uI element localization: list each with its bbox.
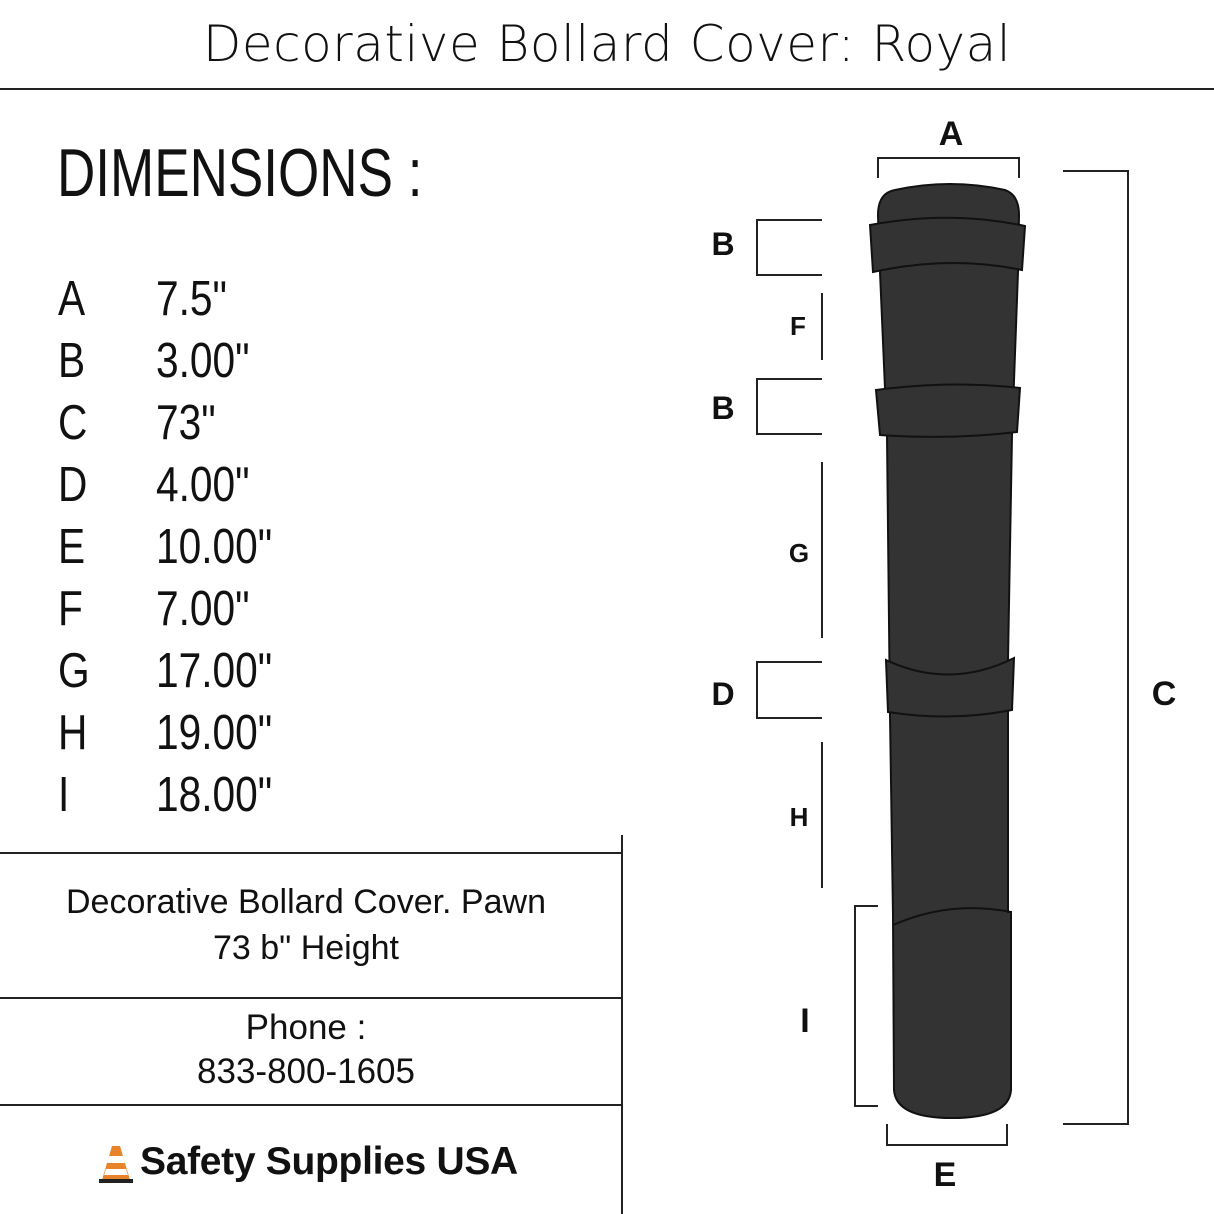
- dimension list: C: [58, 396, 87, 450]
- product name box: 73 b" Height: [213, 929, 399, 967]
- bollard diagram: B: [711, 226, 735, 262]
- dimension list: A: [58, 272, 85, 326]
- dimension values: 7.00": [156, 582, 250, 636]
- dimension list: E: [58, 520, 85, 574]
- dimension list: F: [58, 582, 83, 636]
- bollard diagram: D: [711, 676, 735, 712]
- bollard diagram: A: [939, 115, 963, 153]
- bollard diagram: E: [934, 1156, 956, 1194]
- bollard diagram: H: [790, 802, 808, 832]
- bollard diagram: G: [789, 538, 809, 568]
- bollard diagram: I: [800, 1002, 810, 1040]
- heading: dimensions: DIMENSIONS :: [57, 135, 422, 211]
- bollard: [870, 184, 1025, 1118]
- bollard diagram: B: [711, 390, 735, 426]
- dimension values: 7.5": [156, 272, 227, 326]
- dimension values: 3.00": [156, 334, 250, 388]
- phone box: Phone :: [246, 1008, 366, 1047]
- dimension list: [58, 272, 90, 822]
- dimension values: [156, 272, 272, 822]
- title: Decorative Bollard Cover: Royal: [203, 15, 1011, 73]
- dimension values: 10.00": [156, 520, 272, 574]
- dimension list: B: [58, 334, 85, 388]
- logo: Safety Supplies USA: [140, 1140, 518, 1183]
- bollard diagram: F: [790, 311, 806, 341]
- dimension list: D: [58, 458, 87, 512]
- phone box: [197, 1008, 415, 1091]
- dimension values: 17.00": [156, 644, 272, 698]
- dimension values: 18.00": [156, 768, 272, 822]
- product name box: [66, 883, 546, 967]
- dimension values: 73": [156, 396, 216, 450]
- bollard diagram: C: [1152, 675, 1176, 713]
- icon: traffic cone: [99, 1146, 133, 1183]
- dimension values: 19.00": [156, 706, 272, 760]
- dimension values: 4.00": [156, 458, 250, 512]
- product name box: Decorative Bollard Cover. Pawn: [66, 883, 546, 921]
- dimension list: H: [58, 706, 87, 760]
- phone box: 833-800-1605: [197, 1052, 415, 1091]
- dimension list: G: [58, 644, 90, 698]
- dimension list: I: [58, 768, 69, 822]
